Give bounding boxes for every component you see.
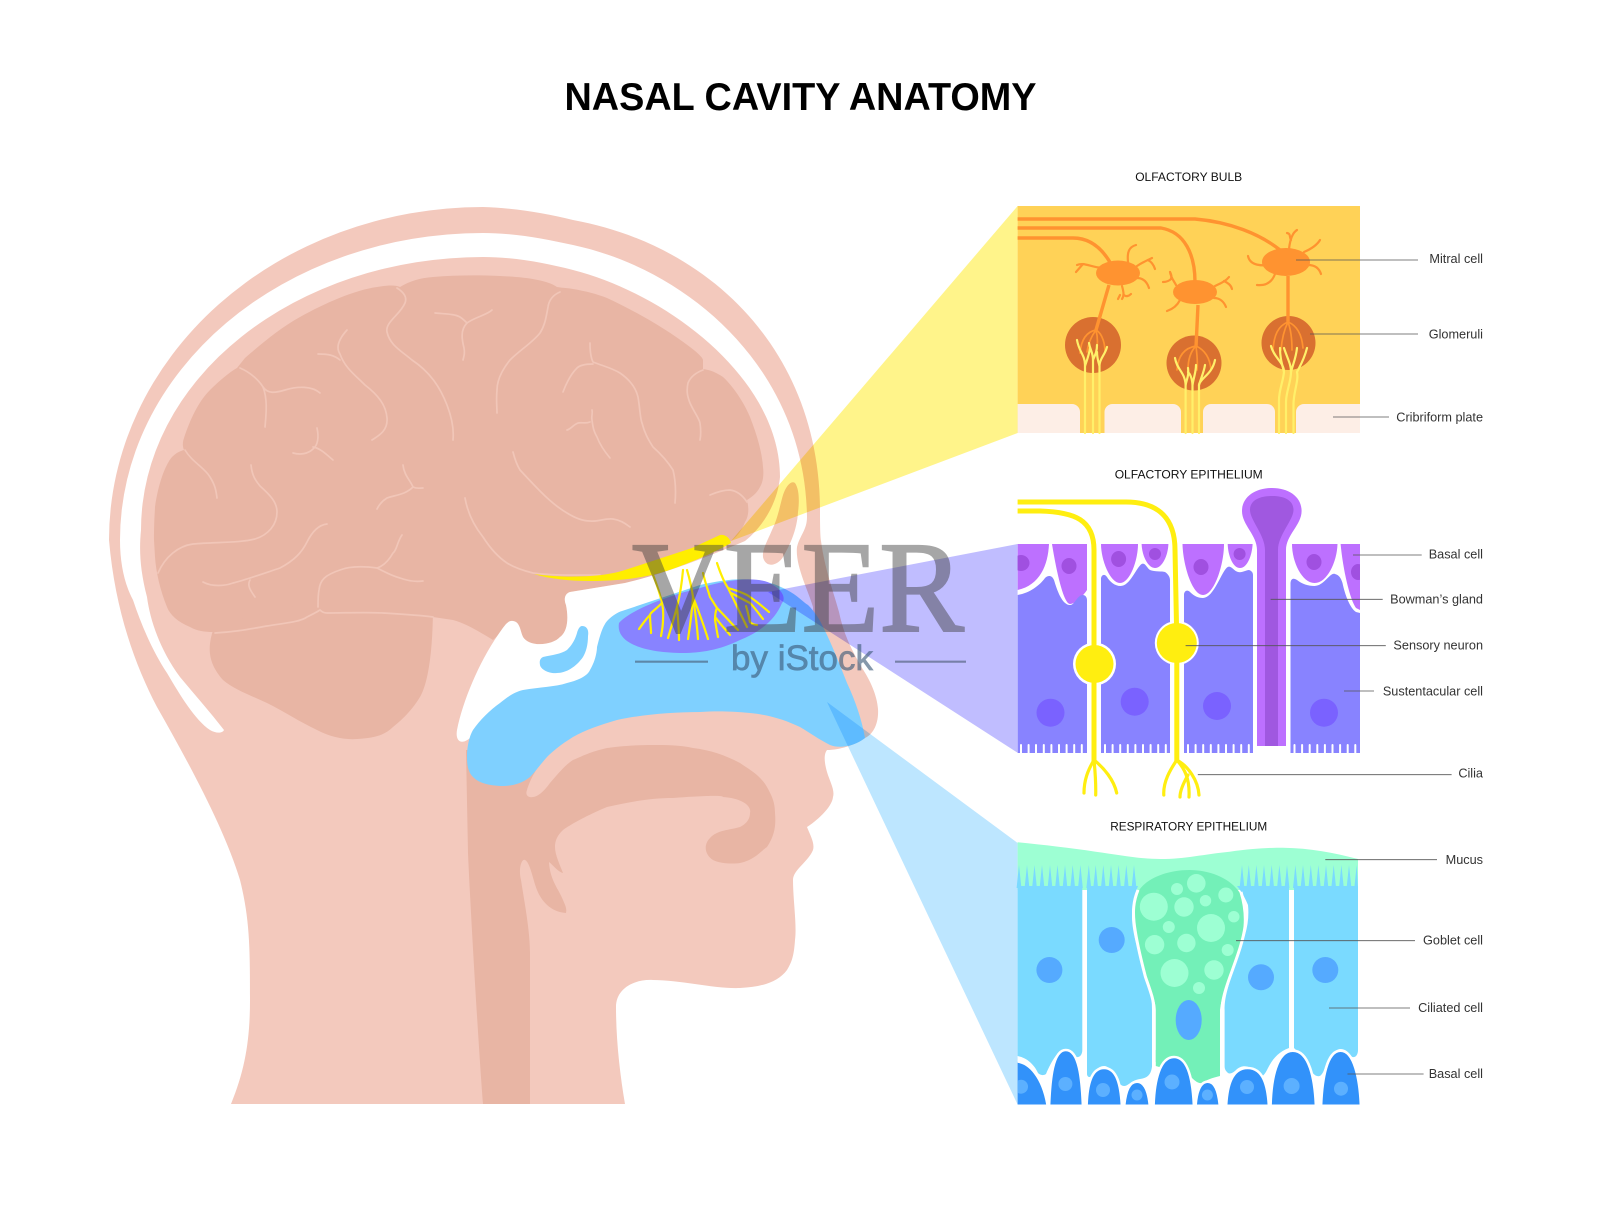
nasal cavity air space	[467, 579, 865, 786]
white air band and nasal space	[120, 233, 815, 742]
cilia	[1017, 865, 1358, 888]
leader lines	[1186, 555, 1452, 775]
label: ciliated cell: Ciliated cell	[1418, 1001, 1483, 1015]
ciliated cells	[1018, 886, 1358, 1086]
basal cells blue	[1010, 1050, 1361, 1108]
olfactory nerve and bulb	[534, 535, 769, 640]
brain gyri	[158, 288, 747, 633]
olfactory region	[619, 579, 784, 653]
label: cribriform plate: Cribriform plate	[1396, 410, 1483, 424]
label: basal cell: Basal cell	[1429, 548, 1483, 562]
head cross-section	[109, 207, 878, 1104]
basal cell nuclei	[1012, 548, 1365, 580]
leader lines	[1236, 860, 1437, 1074]
magnification cone: respiratory epithelium	[827, 702, 1018, 1104]
sensory neurons	[1018, 502, 1199, 797]
sphenoid sinus	[540, 626, 588, 673]
label: goblet cell: Goblet cell	[1423, 934, 1483, 948]
label: mucus: Mucus	[1446, 853, 1483, 867]
panel: olfactory epithelium	[1012, 467, 1484, 797]
panel: respiratory epithelium	[1010, 819, 1483, 1108]
label: basal cell: Basal cell	[1429, 1067, 1483, 1081]
heading: olfactory bulb: OLFACTORY BULB	[1135, 170, 1242, 184]
cribriform plate	[1018, 404, 1360, 433]
head silhouette	[109, 207, 878, 1104]
sustentacular nuclei	[1036, 688, 1338, 727]
label: sustentacular cell: Sustentacular cell	[1383, 684, 1483, 698]
pharynx and oral cavity	[466, 745, 775, 1104]
label: sensory neuron: Sensory neuron	[1393, 638, 1483, 652]
olfactory bulb tract	[534, 535, 731, 581]
olfactory filaments	[639, 563, 769, 640]
mitral cells	[1096, 248, 1310, 304]
ciliated cell nuclei	[1036, 927, 1338, 990]
infographic canvas	[109, 83, 1483, 1104]
watermark: by iStock	[731, 639, 873, 678]
mucus vesicles	[1140, 874, 1240, 994]
leader lines	[1296, 260, 1418, 417]
label: glomeruli: Glomeruli	[1429, 328, 1483, 342]
mitral cell axons and dendrites	[1018, 219, 1321, 370]
mucus layer	[1018, 842, 1358, 890]
basal cells purple	[1018, 544, 1360, 610]
Bowman's gland	[1242, 488, 1302, 746]
cilia notches	[1020, 744, 1356, 753]
panel: olfactory bulb	[1018, 170, 1483, 433]
goblet nucleus	[1176, 1000, 1202, 1040]
glomeruli	[1065, 316, 1316, 390]
goblet cell	[1133, 870, 1246, 1083]
label: mitral cell: Mitral cell	[1429, 252, 1483, 266]
cerebellum	[210, 605, 433, 739]
magnification cone: olfactory epithelium	[768, 544, 1018, 753]
title: NASAL CAVITY ANATOMY	[564, 76, 1036, 119]
heading: olfactory epithelium: OLFACTORY EPITHELIUM	[1115, 467, 1263, 481]
sustentacular cells	[1018, 564, 1360, 753]
epithelium cell layers	[1012, 544, 1365, 756]
magnification cone: olfactory bulb	[731, 206, 1018, 541]
heading: respiratory epithelium: RESPIRATORY EPITHELIUM	[1110, 819, 1267, 833]
bulb background	[1018, 206, 1360, 433]
label: cilia: Cilia	[1458, 766, 1484, 780]
watermark: VEER	[632, 516, 964, 660]
basal cell nuclei blue	[1014, 1074, 1348, 1100]
brain	[154, 275, 763, 644]
olfactory receptor axons	[1077, 340, 1307, 433]
label: Bowman's gland: Bowman’s gland	[1390, 592, 1483, 606]
frontal bone finger	[763, 482, 799, 565]
